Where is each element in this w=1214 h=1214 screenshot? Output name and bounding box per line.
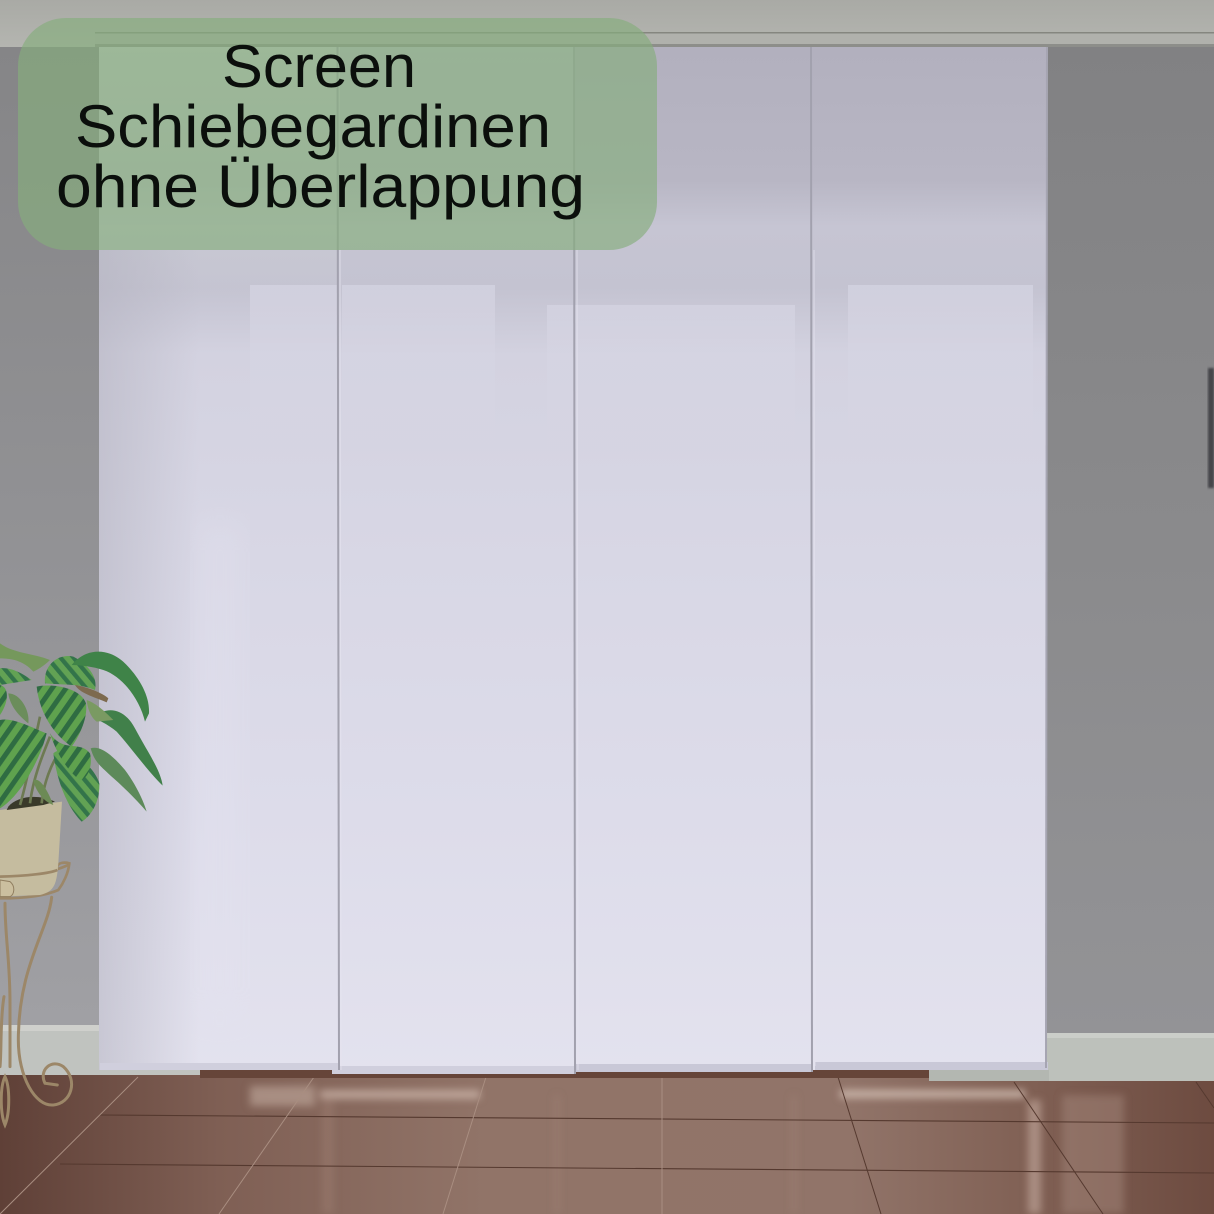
leaves: [0, 643, 50, 672]
stems: [7, 797, 55, 810]
stand: [0, 863, 72, 1125]
panel 1: [99, 47, 340, 1070]
title text: Screen: [222, 33, 416, 100]
panel 2: [332, 47, 574, 1074]
ceiling: [0, 0, 1214, 47]
floor reflections: [250, 1086, 1124, 1214]
panel 4: [811, 47, 1048, 1070]
title text: Schiebegardinen: [75, 93, 551, 160]
title text: ohne Überlappung: [56, 153, 585, 220]
curtain panels: [99, 47, 1048, 1074]
baseboards: [0, 1025, 1214, 1081]
panel seams: [338, 47, 812, 1074]
plant on stand: [0, 643, 163, 1125]
title text: [56, 33, 585, 220]
floor tile lines: [60, 1115, 1214, 1173]
floor: [0, 1074, 1214, 1214]
panel 3: [547, 47, 813, 1072]
pot: [0, 802, 62, 897]
title badge: [18, 18, 657, 250]
